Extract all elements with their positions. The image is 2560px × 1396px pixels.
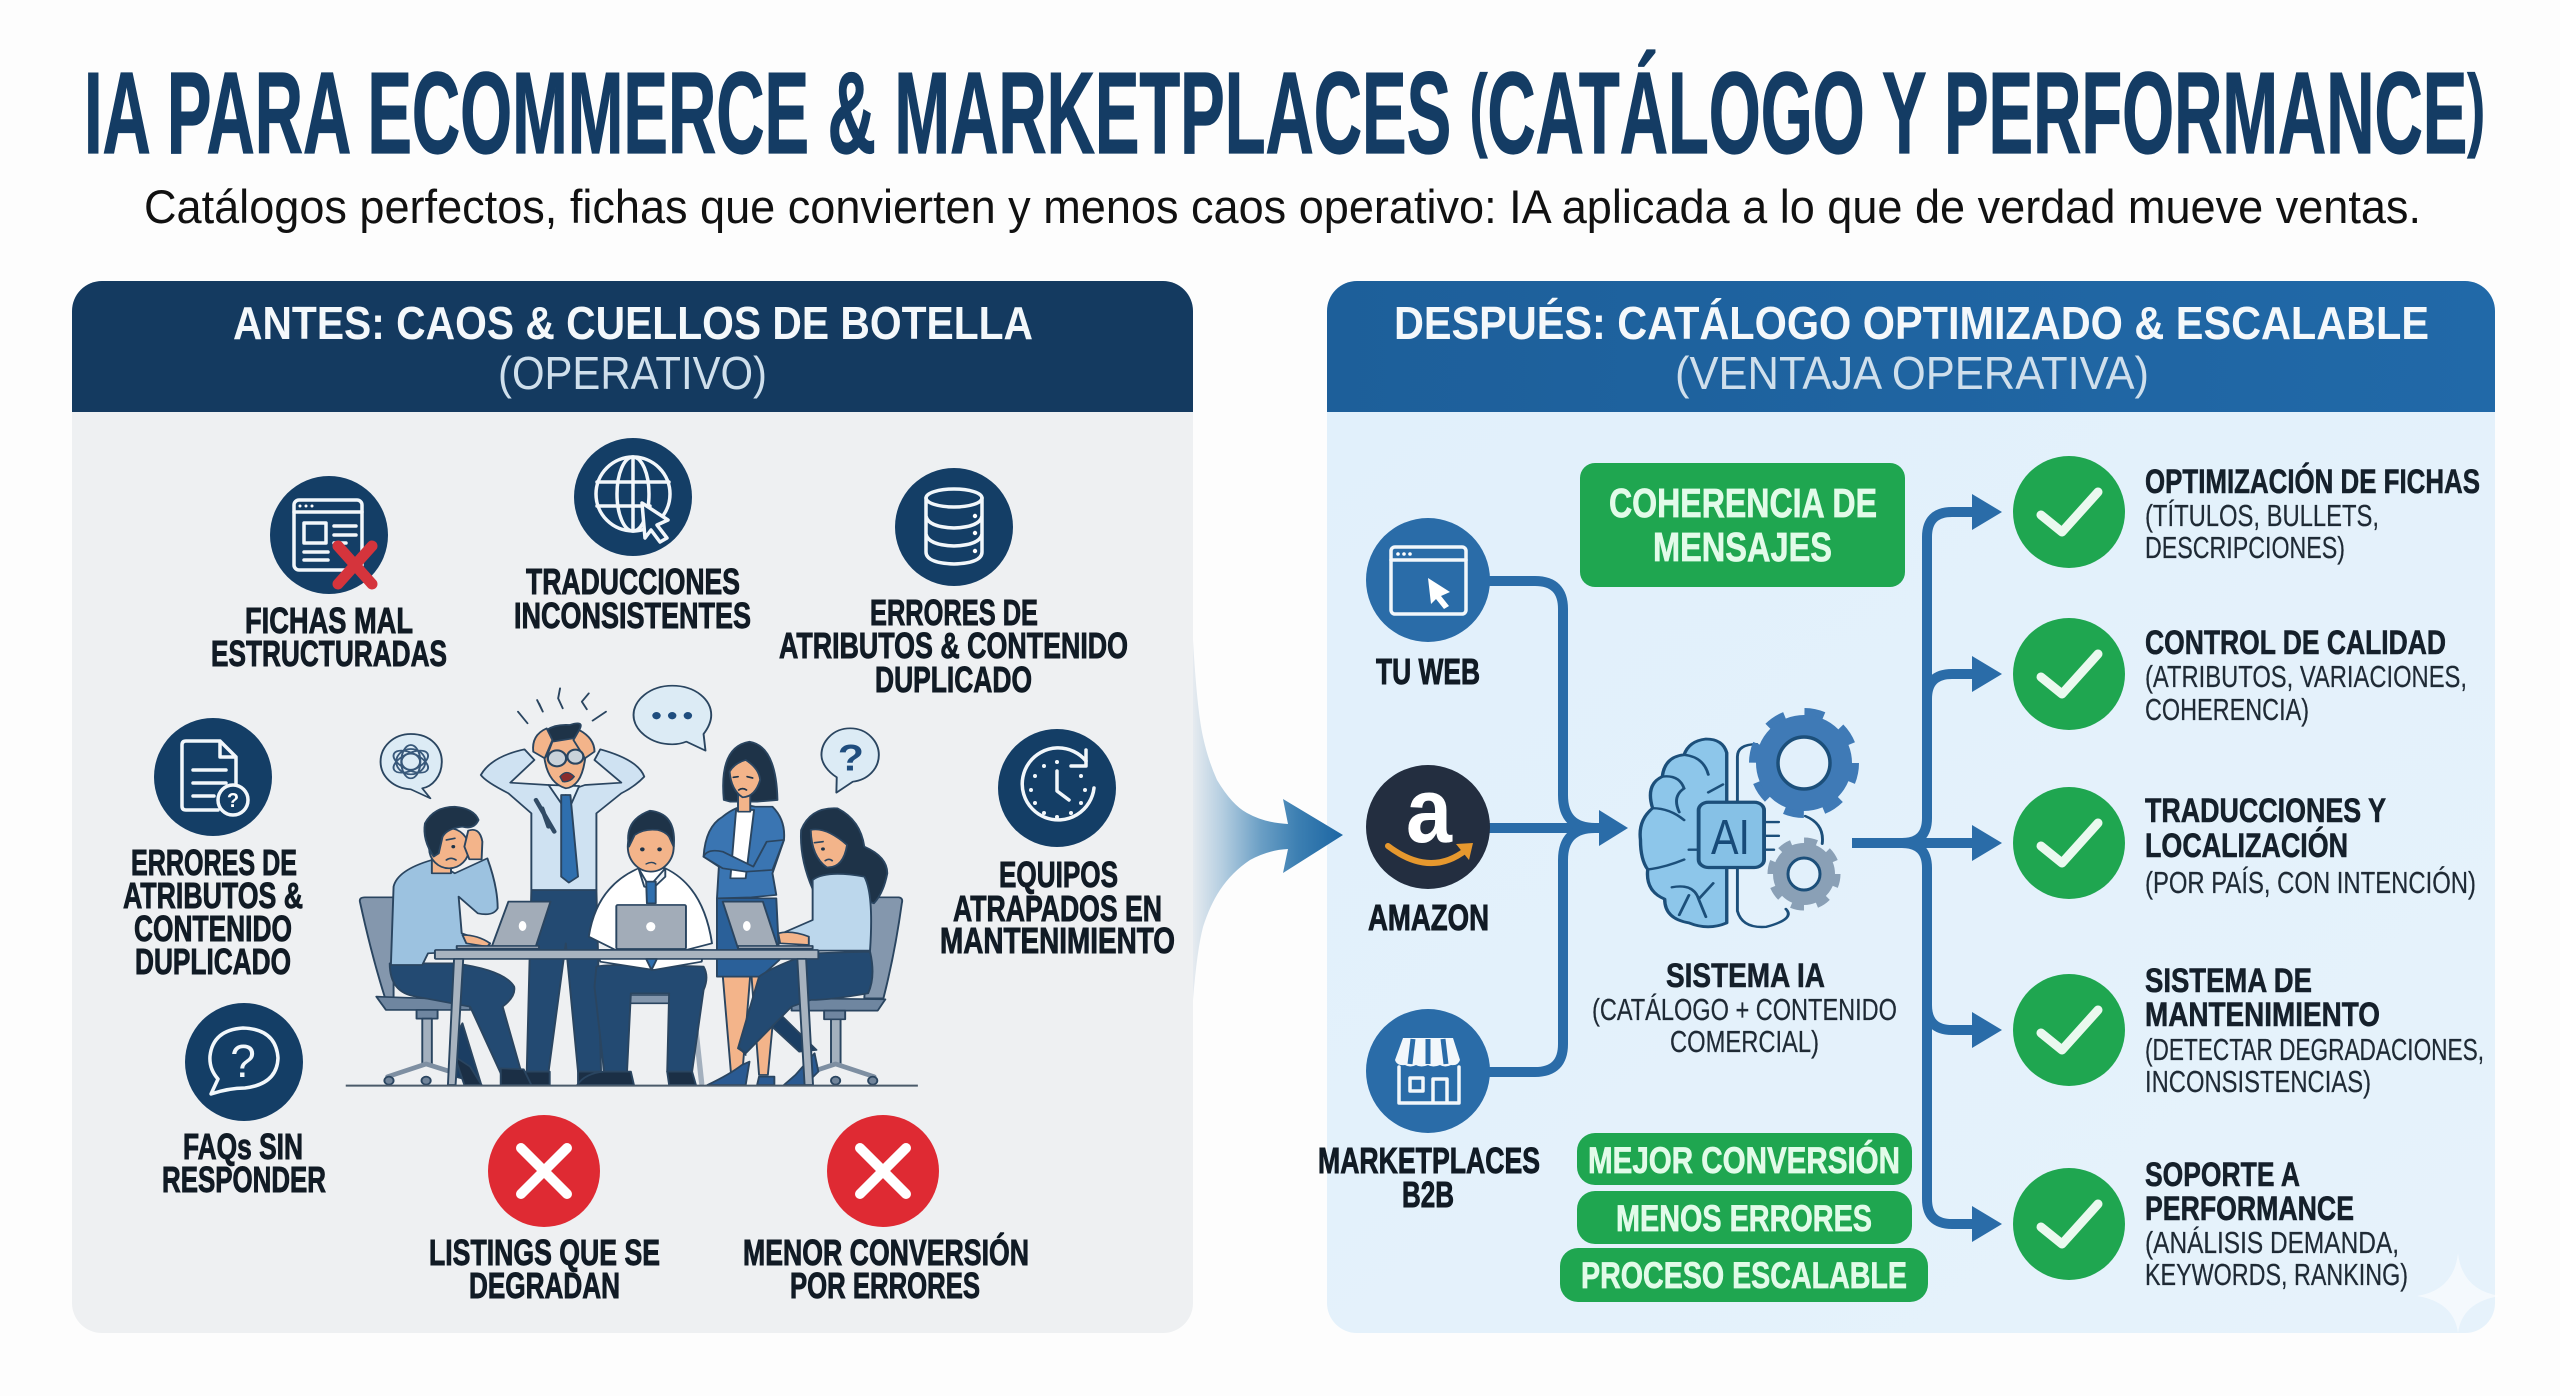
panel header — [1327, 281, 2495, 412]
icon: reloj — [998, 729, 1116, 847]
person: seated left — [390, 807, 531, 1085]
result: optimizacion de fichas — [2013, 456, 2480, 568]
icon: sparkle — [2417, 1253, 2500, 1333]
text: MANTENIMIENTO — [2145, 996, 2380, 1034]
label: errores de atributos izquierda: ERRORES DE — [131, 842, 297, 883]
label: errores de atributos izquierda: CONTENIDO — [134, 908, 292, 949]
icon: amazon: a — [1406, 760, 1453, 862]
arrows: sistema hacia resultados — [1852, 494, 2002, 1242]
bubble: pregunta: ? — [838, 737, 864, 779]
icon: check — [2013, 1168, 2125, 1280]
panel header — [72, 281, 1193, 412]
person: standing man — [481, 688, 644, 1085]
text — [2145, 1156, 2408, 1292]
result: sistema de mantenimiento — [2013, 962, 2484, 1099]
title: ) — [2467, 57, 2485, 159]
text: PERFORMANCE — [2145, 1190, 2354, 1228]
icon: alerta listings — [488, 1115, 600, 1227]
icon: documento con errores — [154, 718, 272, 836]
text — [2145, 962, 2484, 1099]
chair: center — [600, 995, 702, 1083]
label: marketplaces b2b: B2B — [1402, 1174, 1454, 1215]
icon: tu web — [1366, 518, 1490, 642]
icon: faqs: ? — [230, 1035, 256, 1087]
label: marketplaces b2b — [1318, 1140, 1540, 1215]
label: errores de atributos central: ERRORES DE — [870, 592, 1038, 633]
result: traducciones y localizacion — [2013, 787, 2476, 900]
chair: left — [360, 897, 470, 1085]
bubble: puntos suspensivos — [634, 686, 711, 751]
icon: marketplaces — [1366, 1009, 1490, 1133]
panel subheading: (OPERATIVO) — [498, 347, 767, 399]
text: KEYWORDS, RANKING) — [2145, 1257, 2408, 1292]
label: errores de atributos izquierda: ATRIBUTOS & — [123, 875, 303, 916]
icon: traducciones — [574, 438, 692, 556]
text — [2145, 624, 2467, 727]
chair: right — [792, 897, 902, 1085]
panel body — [1327, 400, 2495, 1333]
icon: check — [2013, 974, 2125, 1086]
icon: check — [2013, 456, 2125, 568]
text: (TÍTULOS, BULLETS, — [2145, 498, 2379, 533]
panel heading: ANTES: CAOS & CUELLOS DE BOTELLA — [233, 297, 1033, 349]
label: errores de atributos izquierda — [123, 842, 303, 982]
label: sistema ia: COMERCIAL) — [1670, 1024, 1819, 1059]
icon: amazon — [1366, 760, 1490, 889]
label: fichas mal estructuradas — [211, 600, 447, 674]
badge: proceso escalable: PROCESO ESCALABLE — [1581, 1255, 1907, 1296]
label: errores de atributos central: DUPLICADO — [875, 659, 1032, 700]
label: traducciones inconsistentes: INCONSISTENTES — [514, 595, 751, 636]
callout: coherencia de mensajes: COHERENCIA DE — [1609, 480, 1877, 526]
label: amazon: AMAZON — [1368, 897, 1489, 938]
title: ( — [1470, 57, 1488, 159]
illustration: equipo estresado — [346, 686, 918, 1086]
text: LOCALIZACIÓN — [2145, 827, 2348, 865]
label: marketplaces b2b: MARKETPLACES — [1318, 1140, 1540, 1181]
text: (ATRIBUTOS, VARIACIONES, — [2145, 659, 2467, 694]
arrow: transicion antes a despues — [1193, 640, 1343, 1000]
label: equipos atrapados: MANTENIMIENTO — [940, 920, 1175, 961]
icon: documento con errores: ? — [227, 790, 239, 812]
icon: faqs — [185, 1003, 303, 1121]
text: SISTEMA DE — [2145, 962, 2312, 1000]
label: errores de atributos central: ATRIBUTOS & CONTENIDO — [779, 625, 1128, 666]
label: sistema ia — [1592, 957, 1897, 1059]
label: listings — [429, 1232, 660, 1306]
table and laptops — [435, 902, 818, 1085]
label: errores de atributos central — [779, 592, 1128, 700]
label: conversion: MENOR CONVERSIÓN — [743, 1231, 1029, 1273]
label: conversion: POR ERRORES — [790, 1265, 980, 1306]
label: traducciones inconsistentes — [514, 561, 751, 636]
text: CONTROL DE CALIDAD — [2145, 624, 2446, 662]
label: listings: DEGRADAN — [469, 1265, 620, 1306]
label: tu web: TU WEB — [1376, 651, 1480, 692]
bubble: pregunta — [821, 728, 879, 793]
panel body — [72, 400, 1193, 1333]
icon: base de datos — [895, 468, 1013, 586]
label: conversion — [743, 1231, 1029, 1306]
callout: coherencia de mensajes: MENSAJES — [1653, 524, 1832, 570]
result: soporte a performance — [2013, 1156, 2408, 1292]
panel subheading: (VENTAJA OPERATIVA) — [1675, 347, 2149, 399]
chip label: AI — [1711, 811, 1750, 865]
icon: sistema ia — [1640, 714, 1853, 927]
label: faqs sin responder: RESPONDER — [162, 1159, 326, 1200]
callout: coherencia de mensajes — [1580, 463, 1905, 587]
text: (ANÁLISIS DEMANDA, — [2145, 1225, 2399, 1260]
result: control de calidad — [2013, 618, 2467, 730]
bubble: enredo — [381, 734, 442, 798]
label: fichas mal estructuradas: FICHAS MAL — [245, 600, 413, 641]
person: seated center — [577, 811, 712, 1085]
label: equipos atrapados — [940, 854, 1175, 961]
text: INCONSISTENCIAS) — [2145, 1064, 2371, 1099]
person: standing woman — [704, 742, 784, 1085]
label: equipos atrapados: ATRAPADOS EN — [953, 888, 1162, 929]
icon: check — [2013, 787, 2125, 899]
panel: despues — [1318, 281, 2500, 1333]
badge: proceso escalable — [1560, 1248, 1928, 1302]
label: equipos atrapados: EQUIPOS — [999, 854, 1118, 895]
icon: fichas mal estructuradas — [270, 476, 388, 594]
label: faqs sin responder — [162, 1126, 326, 1200]
person: seated right — [738, 808, 887, 1085]
label: errores de atributos izquierda: DUPLICADO — [135, 941, 291, 982]
title: IA PARA ECOMMERCE & MARKETPLACES — [84, 48, 2458, 178]
panel heading: DESPUÉS: CATÁLOGO OPTIMIZADO & ESCALABLE — [1394, 297, 2429, 349]
badges: beneficios — [1560, 1133, 1928, 1302]
subtitle: Catálogos perfectos, fichas que convierten y menos caos operativo: IA aplicada a lo que de verdad mueve ventas. — [144, 180, 2421, 233]
text: SOPORTE A — [2145, 1156, 2300, 1194]
brain — [1640, 739, 1822, 927]
label: sistema ia: (CATÁLOGO + CONTENIDO — [1592, 992, 1897, 1027]
text: TRADUCCIONES Y — [2145, 792, 2386, 830]
gear small — [1772, 842, 1836, 906]
badge: mejor conversion — [1577, 1133, 1912, 1185]
icon: alerta conversion — [827, 1115, 939, 1227]
label: fichas mal estructuradas: ESTRUCTURADAS — [211, 633, 447, 674]
badge: menos errores: MENOS ERRORES — [1616, 1198, 1872, 1239]
badge: menos errores — [1577, 1191, 1912, 1244]
panel: antes — [72, 281, 1193, 1333]
text — [2145, 792, 2476, 900]
label: listings: LISTINGS QUE SE — [429, 1232, 660, 1273]
label: faqs sin responder: FAQs SIN — [183, 1126, 303, 1167]
badge: mejor conversion: MEJOR CONVERSIÓN — [1588, 1139, 1900, 1181]
floor — [346, 1083, 918, 1089]
arrows: fuentes hacia sistema — [1488, 581, 1628, 1072]
text: DESCRIPCIONES) — [2145, 530, 2345, 565]
gear large — [1755, 714, 1853, 812]
label: traducciones inconsistentes: TRADUCCIONES — [526, 561, 740, 602]
label: sistema ia: SISTEMA IA — [1666, 957, 1825, 995]
icon: check — [2013, 618, 2125, 730]
text: COHERENCIA) — [2145, 692, 2309, 727]
text — [2145, 463, 2480, 565]
